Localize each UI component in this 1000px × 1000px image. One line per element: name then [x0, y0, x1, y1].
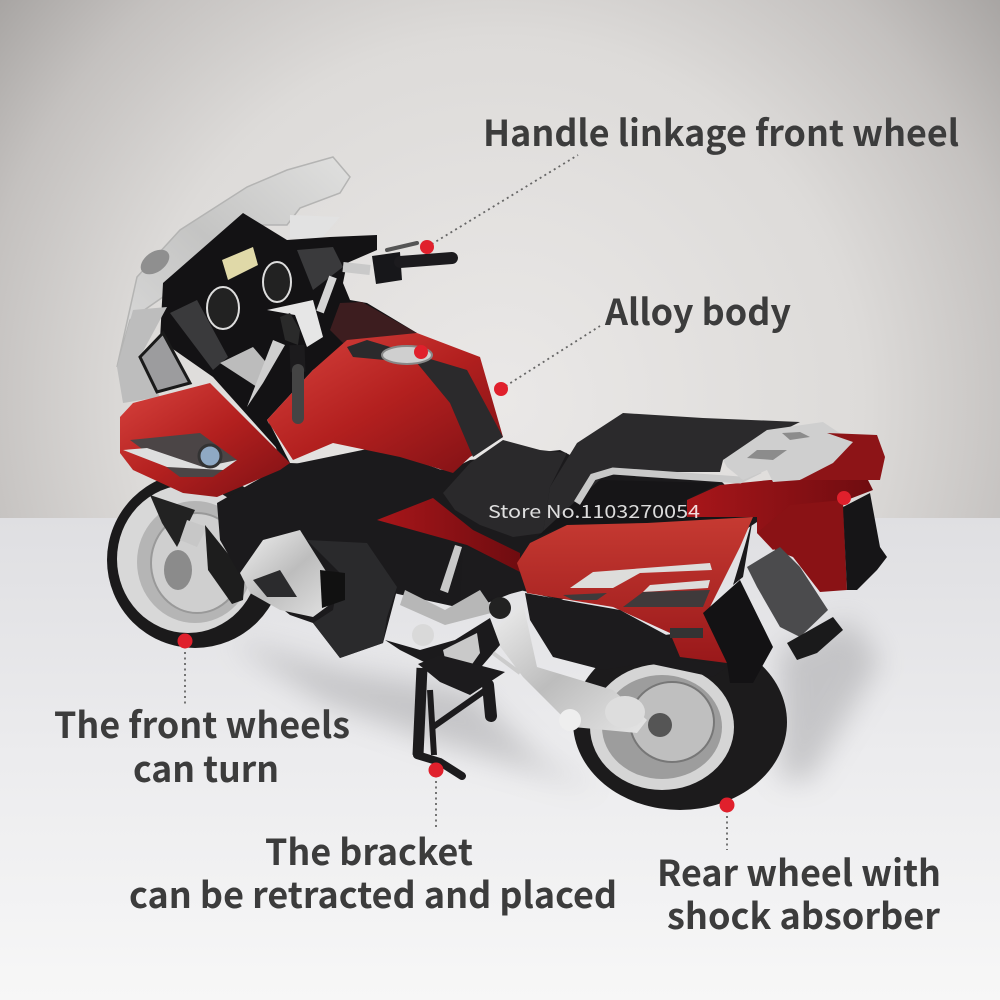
motorcycle: [107, 157, 887, 810]
rail: [577, 470, 760, 503]
fairing: [120, 383, 290, 497]
callout: front wheels: [54, 634, 350, 793]
callout: alloy body: [494, 284, 791, 396]
right handlebar: [320, 243, 452, 312]
front wheel: [107, 472, 283, 648]
upper tail: [800, 433, 885, 480]
left handlebar: [247, 313, 300, 418]
rear wheel: [573, 634, 787, 810]
front seat: [443, 440, 567, 537]
pannier: [517, 517, 773, 683]
body backing: [268, 420, 760, 610]
callout: bracket: can be retracted and placed: [129, 867, 617, 919]
callout: rear wheel: Rear wheel with: [657, 845, 941, 897]
callout: handle linkage: Handle linkage front wheel: [483, 105, 959, 157]
watermark: Store No.1103270054: [488, 498, 700, 524]
engine and frame: [217, 447, 525, 680]
rear seat: [537, 413, 800, 537]
license plate: [747, 547, 843, 660]
background wall: [0, 0, 1000, 518]
windshield: [117, 157, 350, 367]
center stand: [417, 655, 505, 776]
callout: rear wheel: [657, 798, 941, 940]
dashboard: [160, 213, 417, 463]
callout: rear wheel: shock absorber: [667, 888, 940, 940]
callout: front wheels: The front wheels: [54, 697, 350, 749]
hotspot dots: [414, 345, 851, 505]
fairing stripes and logo: [123, 433, 237, 477]
callout: alloy body: Alloy body: [604, 284, 791, 336]
headlight: [140, 333, 190, 392]
rear tail red: [687, 478, 873, 550]
black tail fill: [537, 480, 753, 537]
callout: bracket: The bracket: [265, 824, 473, 876]
tail case: [757, 493, 887, 592]
red side strip: [377, 498, 520, 572]
fuel tank: [267, 302, 503, 473]
floor shadow: [230, 620, 880, 790]
callout: handle linkage: [420, 105, 959, 254]
left clear fairing: [117, 307, 167, 403]
floor: [0, 518, 1000, 1000]
swing arm: [490, 603, 647, 733]
callout: front wheels: can turn: [133, 741, 279, 793]
rack: [723, 422, 853, 482]
callout: bracket: [129, 762, 617, 919]
